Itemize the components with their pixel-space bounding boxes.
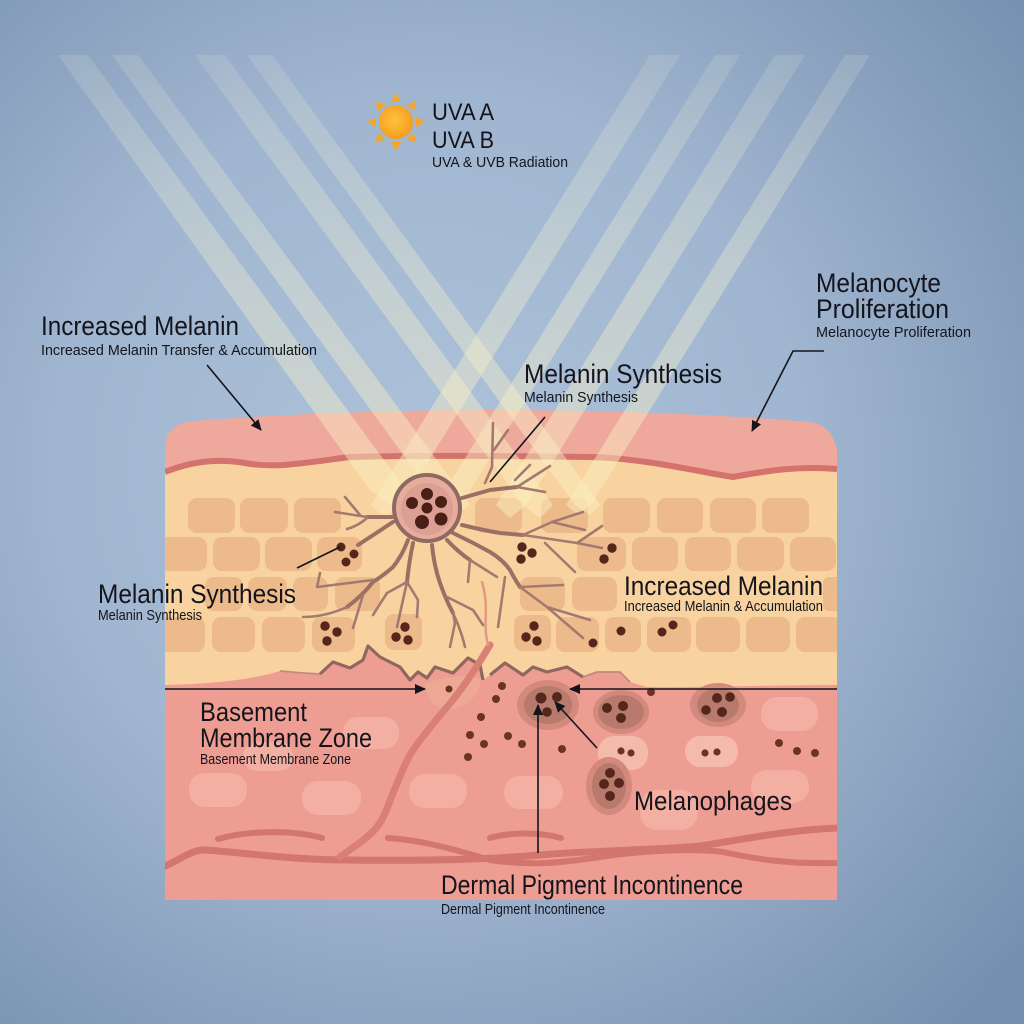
heading line 2: Membrane Zone [200,723,372,753]
subtext: Melanin Synthesis [98,607,202,624]
subtext: Increased Melanin & Accumulation [624,598,823,615]
melanocyte inner ring [401,483,453,535]
arrow: increased melanin to upper skin [207,365,261,430]
callout: increased melanin right [624,571,823,615]
heading line 2: Proliferation [816,294,949,324]
melanocyte [303,423,602,647]
subtext: Dermal Pigment Incontinence [441,901,605,918]
basement membrane breach patch [425,676,481,710]
label: melanophages: Melanophages [634,786,792,816]
vessel rising to the basement membrane [340,645,490,857]
subtext: Increased Melanin Transfer & Accumulation [41,342,317,359]
heading: Melanin Synthesis [98,579,296,609]
uv light rays [58,55,870,518]
pale dermal patches [189,697,818,830]
epidermis layer [165,456,837,687]
label: UVA B: UVA B [432,127,494,154]
zigzag main run [320,646,583,680]
callout: melanocyte proliferation [816,268,971,341]
heading: Melanin Synthesis [524,359,722,389]
melanophages [517,680,746,815]
melanophage 3 [690,683,746,727]
heading: Increased Melanin [624,571,823,601]
subtext: Melanocyte Proliferation [816,324,971,341]
skin cross-section [160,405,843,900]
arrows [165,351,837,853]
epidermal cells [160,498,843,652]
subtext: Basement Membrane Zone [200,751,351,768]
arrow: basement membrane from left [165,688,425,690]
dermal capillaries [165,582,837,866]
melanophage 4 [586,757,632,815]
arrow: pointer to melanophage granule [555,702,597,748]
heading: Dermal Pigment Incontinence [441,870,743,900]
dermis layer [165,630,837,900]
sun rays [367,93,425,151]
zigzag faded ends [280,671,630,682]
callout: basement membrane zone [200,697,372,768]
heading: Basement [200,697,307,727]
melanocyte cell body [394,475,460,541]
callout: melanin synthesis top [524,359,722,406]
melanocyte nucleus granules [406,488,448,529]
heading: Increased Melanin [41,311,239,341]
upper skin wave line [165,456,837,477]
callout: dermal pigment incontinence [441,870,743,918]
melanocyte main dendrites [347,487,523,613]
label: UVA and UVB radiation: UVA & UVB Radiation [432,154,568,171]
melanophage 1 [517,680,579,730]
callout: increased melanin transfer [41,311,317,359]
basement membrane zigzag [280,646,630,682]
free dermal pigment granules [446,682,819,761]
arrow: dermal pigment incontinence upward [537,705,539,853]
heading: Melanocyte [816,268,941,298]
sun disc [379,105,413,139]
subtext: Melanin Synthesis [524,389,638,406]
melanophage 2 [593,690,649,734]
uv labels [432,99,568,171]
stratum corneum layer [165,410,837,474]
melanin granules in epidermis [320,542,678,648]
arrow: melanocyte proliferation to upper skin [752,351,824,431]
sun icon [367,93,425,151]
label: UVA A: UVA A [432,99,494,126]
melanocyte fine dendrite branches [303,423,602,647]
pointer: melanin synthesis left to granule [297,547,340,568]
callout: melanin synthesis left [98,579,296,624]
arrow: from right margin to melanophage [570,688,837,690]
pointer: melanin synthesis to dendrite [490,417,545,482]
